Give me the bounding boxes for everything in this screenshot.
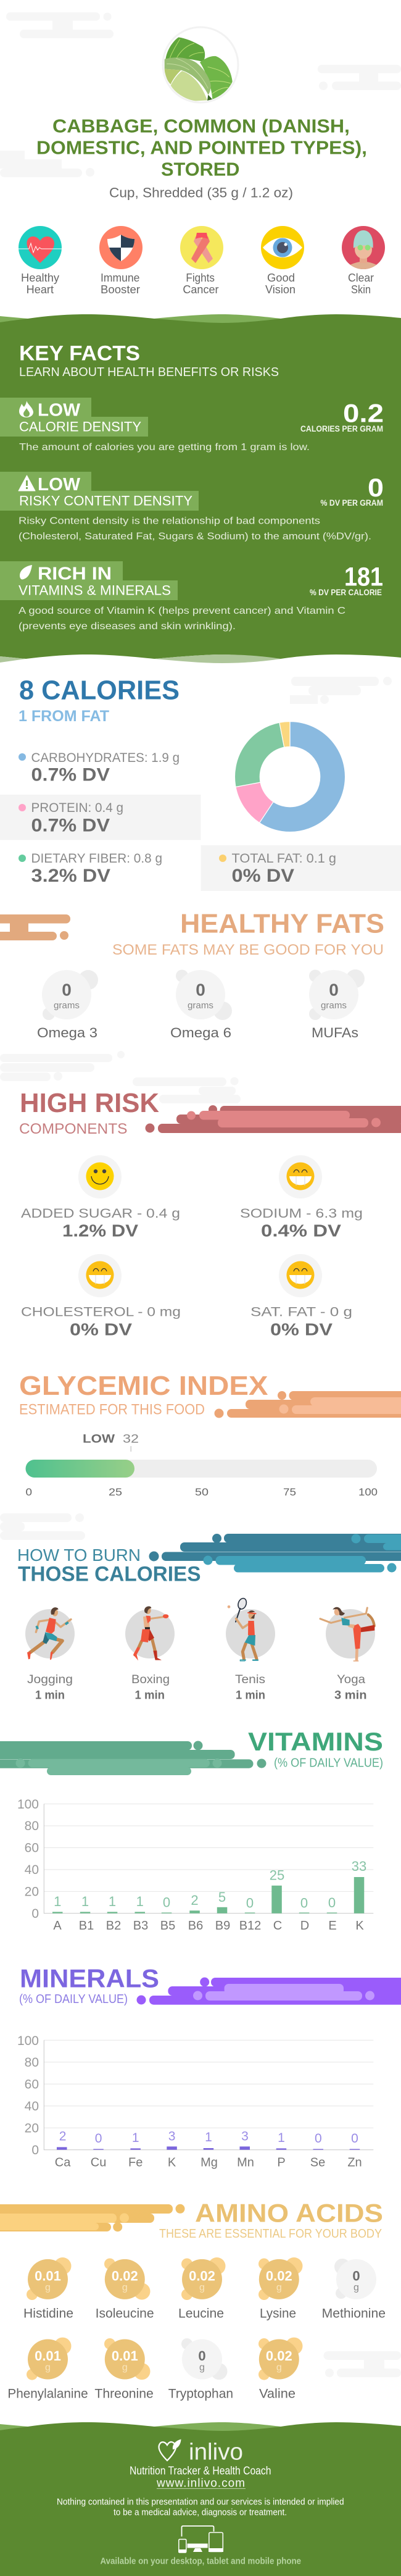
item: valine: g: [276, 2362, 282, 2373]
icon: clear skin: Clear: [348, 272, 374, 284]
icon: good vision eye: Vision: [265, 283, 296, 296]
bar chart: minerals: Se: [310, 2156, 325, 2169]
item: omega 3: 0: [62, 981, 72, 1000]
item: threonine: Threonine: [94, 2387, 154, 2401]
item: omega 3: grams: [54, 1000, 80, 1011]
legend: total fat: [201, 845, 401, 891]
item: phenylalanine: Phenylalanine: [7, 2387, 88, 2401]
item: omega 6: [170, 969, 232, 1040]
item: saturated fat: [250, 1254, 352, 1339]
item: histidine: g: [45, 2283, 51, 2293]
item: histidine: [23, 2257, 73, 2321]
fact: rich in vitamins and minerals: A good source of Vitamin K (helps prevent cancer) and Vitamin C: [19, 606, 345, 616]
item: mufas: [309, 969, 365, 1040]
bar chart: minerals: 20: [25, 2122, 39, 2135]
bar chart: minerals: 2: [59, 2130, 66, 2144]
heading: calories: [19, 675, 180, 725]
heading: healthy fats: HEALTHY FATS: [180, 909, 384, 939]
legend: total fat: TOTAL FAT: 0.1 g: [232, 851, 336, 866]
item: threonine: g: [122, 2362, 128, 2373]
bar chart: minerals: 0: [95, 2131, 102, 2146]
heading: minerals: [19, 1963, 159, 2006]
bar chart: vitamins: 2: [191, 1892, 199, 1908]
bar chart: minerals: 3: [241, 2130, 249, 2144]
tagline and website: Nutrition Tracker & Health Coach: [130, 2465, 271, 2477]
item: lysine: g: [276, 2283, 282, 2293]
panel: high risk components: [19, 1088, 401, 1339]
item: tryptophan: [168, 2338, 233, 2401]
bar chart: vitamins: B6: [188, 1919, 203, 1933]
item: leucine: [178, 2257, 226, 2321]
title: CABBAGE, COMMON (DANISH,: [52, 115, 350, 136]
bar chart: minerals: P: [277, 2156, 286, 2169]
item: mufas: 0: [329, 981, 339, 1000]
decoration: healthy fats bars: [0, 914, 70, 940]
logo: inlivo: inlivo: [189, 2439, 243, 2465]
item: added sugar: 1.2% DV: [62, 1221, 138, 1240]
heading: amino acids: AMINO ACIDS: [195, 2198, 383, 2227]
item: lysine: 0.02: [266, 2269, 292, 2284]
decoration: glycemic bars: [215, 1391, 401, 1418]
activity: jogging: [25, 1607, 75, 1702]
icon: fights cancer ribbon: [180, 226, 223, 296]
activity: jogging: Jogging: [27, 1673, 73, 1686]
fact: rich in vitamins and minerals: RICH IN: [38, 564, 112, 584]
heading: vitamins: (% OF DAILY VALUE): [274, 1757, 383, 1770]
gauge: glycemic index bar: 0: [26, 1486, 32, 1498]
panel: calories: [0, 675, 401, 891]
bar chart: minerals: 1: [132, 2131, 139, 2145]
item: methionine: Methionine: [322, 2307, 386, 2321]
bar chart: minerals: 100: [17, 2034, 39, 2048]
health benefit icons row: [19, 226, 385, 296]
item: isoleucine: Isoleucine: [96, 2307, 154, 2321]
item: valine: Valine: [259, 2387, 296, 2401]
logo: inlivo: [159, 2439, 243, 2465]
legend: carbohydrates: CARBOHYDRATES: 1.9 g: [31, 751, 180, 765]
panel: minerals: [17, 1963, 401, 2169]
heading: calories: 1 FROM FAT: [19, 708, 109, 725]
icon: fights cancer ribbon: Cancer: [183, 283, 218, 296]
panel: footer: [0, 2422, 401, 2576]
bar chart: vitamins: 5: [218, 1889, 226, 1905]
fact: low calorie density: CALORIE DENSITY: [19, 419, 141, 435]
heading: minerals: (% OF DAILY VALUE): [19, 1993, 128, 2006]
heading: healthy fats: [112, 909, 384, 958]
bar chart: vitamins: 25: [270, 1867, 284, 1883]
heading: high risk: HIGH RISK: [20, 1088, 159, 1118]
legend: carbohydrates: 0.7% DV: [31, 764, 110, 785]
bar chart: vitamins: B1: [79, 1919, 94, 1933]
bar chart: vitamins: B5: [160, 1919, 175, 1933]
activity: boxing: 1 min: [134, 1689, 165, 1702]
bar chart: vitamins: B12: [239, 1919, 261, 1933]
item: omega 6: 0: [196, 981, 205, 1000]
bar chart: vitamins: E: [328, 1919, 337, 1933]
panel: amino acids: [0, 2198, 386, 2401]
fact: rich in vitamins and minerals: 181: [344, 562, 383, 592]
item: valine: 0.02: [266, 2348, 292, 2364]
item: isoleucine: [96, 2259, 154, 2321]
title: DOMESTIC, AND POINTED TYPES),: [36, 136, 367, 158]
item: lysine: Lysine: [260, 2307, 296, 2321]
activity: tennis: Tenis: [235, 1673, 265, 1686]
heading: minerals: MINERALS: [20, 1963, 159, 1993]
item: sodium: SODIUM - 6.3 mg: [240, 1206, 363, 1221]
heading: glycemic index: ESTIMATED FOR THIS FOOD: [19, 1402, 205, 1418]
fact: low calorie density: [0, 398, 384, 453]
heading: high risk: COMPONENTS: [19, 1121, 127, 1137]
bar chart: vitamins: B2: [106, 1919, 121, 1933]
fact: low calorie density: 0.2: [343, 399, 384, 427]
bar chart: vitamins: A: [53, 1919, 62, 1933]
bar chart: vitamins: 0: [300, 1896, 308, 1910]
legend: dietary fiber: DIETARY FIBER: 0.8 g: [31, 851, 162, 866]
item: methionine: [322, 2259, 386, 2321]
legend: protein: 0.7% DV: [31, 815, 110, 836]
fact: rich in vitamins and minerals: VITAMINS & MINERALS: [19, 583, 171, 598]
fact: low risky content density: RISKY CONTENT DENSITY: [19, 493, 192, 509]
donut chart: [234, 721, 345, 832]
activity: yoga: Yoga: [337, 1673, 365, 1686]
disclaimer: Nothing contained in this presentation and our services is intended or implied: [57, 2496, 344, 2507]
bar chart: vitamins: 0: [328, 1895, 336, 1910]
icon: immune booster: Immune: [101, 272, 139, 284]
bar chart: vitamins: C: [273, 1919, 282, 1933]
item: phenylalanine: [7, 2338, 88, 2401]
item: sodium: 0.4% DV: [261, 1221, 341, 1240]
item: omega 6: grams: [188, 1000, 213, 1011]
legend: dietary fiber: [19, 851, 162, 886]
bar chart: minerals: Mn: [237, 2156, 254, 2169]
bar chart: vitamins: 60: [25, 1841, 39, 1855]
legend: total fat: 0% DV: [232, 866, 294, 886]
activity: jogging: 1 min: [35, 1689, 65, 1702]
title: STORED: [161, 158, 239, 180]
icon: healthy heart: [19, 226, 62, 296]
item: mufas: grams: [321, 1000, 347, 1011]
activity: yoga: [320, 1607, 375, 1702]
activity: boxing: Boxing: [131, 1673, 170, 1686]
legend: dietary fiber: 3.2% DV: [31, 866, 110, 886]
heading: key facts: KEY FACTS: [19, 342, 140, 366]
gauge: glycemic index bar: [26, 1433, 378, 1498]
heading: how to burn: [17, 1545, 201, 1586]
fact: low risky content density: [0, 472, 384, 542]
item: cholesterol: 0% DV: [70, 1320, 132, 1339]
panel: healthy fats: [0, 909, 384, 1040]
bar chart: vitamins: 0: [163, 1894, 170, 1910]
item: lysine: [258, 2257, 302, 2321]
panel: glycemic index: [19, 1371, 401, 1498]
fact: low calorie density: CALORIES PER GRAM: [300, 424, 383, 433]
gauge: glycemic index bar: 25: [109, 1486, 122, 1498]
heading: vitamins: VITAMINS: [248, 1727, 383, 1756]
item: leucine: Leucine: [178, 2307, 224, 2321]
gauge: glycemic index bar: 75: [283, 1486, 296, 1498]
heading: calories: 8 CALORIES: [19, 675, 180, 705]
item: cholesterol: CHOLESTEROL - 0 mg: [21, 1305, 181, 1319]
item: saturated fat: SAT. FAT - 0 g: [250, 1305, 352, 1319]
icon: immune booster: Booster: [101, 283, 140, 296]
bar chart: minerals: 0: [315, 2131, 322, 2146]
bar chart: minerals: 60: [25, 2077, 39, 2092]
bar chart: vitamins: [17, 1797, 373, 1933]
disclaimer: [57, 2496, 344, 2518]
bar chart: vitamins: 1: [54, 1894, 61, 1909]
bar chart: vitamins: 1: [136, 1894, 144, 1909]
activity: tennis: 1 min: [236, 1689, 265, 1702]
fact: low calorie density: The amount of calories you are getting from 1 gram is low.: [19, 442, 310, 453]
item: tryptophan: Tryptophan: [168, 2387, 233, 2401]
heading: glycemic index: GLYCEMIC INDEX: [19, 1371, 268, 1401]
bar chart: minerals: Fe: [128, 2156, 143, 2169]
bar chart: minerals: Cu: [91, 2156, 106, 2169]
availability note: Available on your desktop, tablet and mobile phone: [100, 2556, 301, 2566]
bar chart: minerals: 80: [25, 2055, 39, 2070]
item: tryptophan: g: [199, 2362, 205, 2373]
item: histidine: 0.01: [35, 2269, 61, 2284]
fact: low risky content density: % DV PER GRAM: [321, 498, 383, 508]
panel: vitamins: [0, 1727, 383, 1933]
heading: amino acids: [159, 2198, 383, 2241]
item: added sugar: [21, 1155, 180, 1240]
icon: healthy heart: Healthy: [21, 272, 59, 284]
item: omega 3: Omega 3: [37, 1025, 97, 1040]
panel: how to burn those calories: [17, 1534, 401, 1702]
item: tryptophan: 0: [198, 2348, 206, 2364]
heading: key facts: [19, 342, 279, 379]
item: valine: [258, 2338, 302, 2401]
item: phenylalanine: g: [45, 2362, 51, 2373]
bar chart: vitamins: 1: [109, 1894, 116, 1909]
heading: vitamins: [248, 1727, 383, 1770]
item: cholesterol: [21, 1254, 181, 1339]
bar chart: minerals: K: [168, 2156, 176, 2169]
bar chart: minerals: 1: [278, 2131, 285, 2145]
heading: high risk: [19, 1088, 159, 1137]
item: mufas: MUFAs: [312, 1025, 358, 1040]
bar chart: vitamins: 0: [246, 1896, 254, 1910]
gauge: glycemic index bar: 32: [123, 1433, 139, 1446]
bar chart: minerals: Zn: [347, 2156, 362, 2169]
fact: rich in vitamins and minerals: [0, 561, 383, 632]
item: threonine: 0.01: [112, 2348, 138, 2364]
bar chart: minerals: Mg: [200, 2156, 218, 2169]
icon: devices: [178, 2526, 223, 2553]
fact: rich in vitamins and minerals: (prevents eye diseases and skin wrinkling).: [19, 621, 236, 632]
icon: clear skin: Skin: [351, 283, 371, 296]
disclaimer: to be a medical advice, diagnosis or treatment.: [114, 2507, 287, 2518]
heading: glycemic index: [19, 1371, 268, 1418]
decoration: vitamins bars: [0, 1741, 267, 1775]
bar chart: minerals: 0: [31, 2143, 39, 2157]
bar chart: minerals: 40: [25, 2099, 39, 2114]
bar chart: vitamins: B9: [215, 1919, 230, 1933]
tagline and website: [130, 2465, 271, 2490]
heading: how to burn: HOW TO BURN: [17, 1545, 141, 1565]
heading: key facts: LEARN ABOUT HEALTH BENEFITS OR RISKS: [19, 366, 279, 379]
bar chart: vitamins: D: [300, 1919, 309, 1933]
activity: yoga: 3 min: [334, 1689, 366, 1702]
icon: good vision eye: Good: [267, 272, 295, 284]
decoration: amino acid bars: [0, 2204, 185, 2231]
legend: protein: [0, 795, 201, 840]
bar chart: minerals: 3: [168, 2130, 175, 2144]
serving size: Cup, Shredded (35 g / 1.2 oz): [109, 185, 293, 200]
bar chart: vitamins: 1: [81, 1894, 89, 1909]
bar chart: vitamins: B3: [133, 1919, 148, 1933]
item: isoleucine: g: [122, 2283, 128, 2293]
icon: fights cancer ribbon: Fights: [186, 272, 215, 284]
heading: how to burn: THOSE CALORIES: [18, 1562, 201, 1586]
decoration: high risk bars: [146, 1105, 401, 1133]
bar chart: minerals: Ca: [55, 2156, 71, 2169]
gauge: glycemic index bar: LOW: [83, 1433, 115, 1446]
fact: low risky content density: Risky Content density is the relationship of bad components: [19, 516, 320, 526]
item: omega 3: [37, 970, 98, 1040]
item: threonine: [94, 2338, 154, 2401]
icon: healthy heart: Heart: [27, 283, 54, 296]
icon: good vision eye: [261, 226, 304, 296]
bar chart: vitamins: 100: [17, 1797, 39, 1812]
item: omega 6: Omega 6: [170, 1025, 231, 1040]
item: isoleucine: 0.02: [112, 2269, 138, 2284]
tagline and website: www.inlivo.com: [156, 2477, 245, 2490]
heading: amino acids: THESE ARE ESSENTIAL FOR YOUR BODY: [159, 2227, 382, 2241]
item: leucine: 0.02: [189, 2269, 215, 2284]
item: added sugar: ADDED SUGAR - 0.4 g: [21, 1206, 180, 1221]
icon: clear skin: [342, 226, 385, 296]
gauge: glycemic index bar: 50: [195, 1486, 209, 1498]
activity: boxing: [125, 1607, 175, 1702]
decoration: minerals bars: [137, 1977, 401, 2005]
bar chart: vitamins: K: [355, 1919, 364, 1933]
activity: tennis: [226, 1597, 275, 1702]
item: leucine: g: [199, 2283, 205, 2293]
fact: low risky content density: LOW: [38, 475, 81, 495]
title: [36, 115, 367, 180]
decoration: burn bars: [149, 1534, 401, 1572]
bar chart: minerals: 1: [205, 2130, 212, 2144]
fact: low risky content density: (Cholesterol, Saturated Fat, Sugars & Sodium) to the amount (%DV/gr).: [19, 531, 371, 542]
legend: protein: PROTEIN: 0.4 g: [31, 801, 123, 815]
fact: rich in vitamins and minerals: % DV PER CALORIE: [310, 588, 382, 597]
heading: healthy fats: SOME FATS MAY BE GOOD FOR YOU: [112, 942, 384, 958]
bar chart: vitamins: 20: [25, 1884, 39, 1899]
item: phenylalanine: 0.01: [35, 2348, 61, 2364]
header: food photo and title: [36, 27, 367, 200]
bar chart: vitamins: 40: [25, 1863, 39, 1877]
panel: key facts: [0, 314, 401, 663]
bar chart: vitamins: 0: [31, 1907, 39, 1921]
item: methionine: g: [353, 2283, 359, 2293]
legend: carbohydrates: [19, 751, 180, 785]
fact: low calorie density: LOW: [38, 400, 81, 420]
gauge: glycemic index bar: 100: [358, 1486, 378, 1498]
fact: low risky content density: 0: [368, 473, 384, 502]
icon: immune booster: [99, 226, 143, 296]
bar chart: minerals: 0: [351, 2131, 358, 2146]
image: cabbage: [163, 27, 238, 102]
item: histidine: Histidine: [23, 2307, 73, 2321]
item: saturated fat: 0% DV: [270, 1320, 333, 1339]
bar chart: vitamins: 33: [352, 1859, 366, 1874]
item: methionine: 0: [352, 2269, 360, 2284]
bar chart: minerals: [17, 2034, 373, 2169]
item: sodium: [240, 1155, 363, 1240]
bar chart: vitamins: 80: [25, 1819, 39, 1833]
